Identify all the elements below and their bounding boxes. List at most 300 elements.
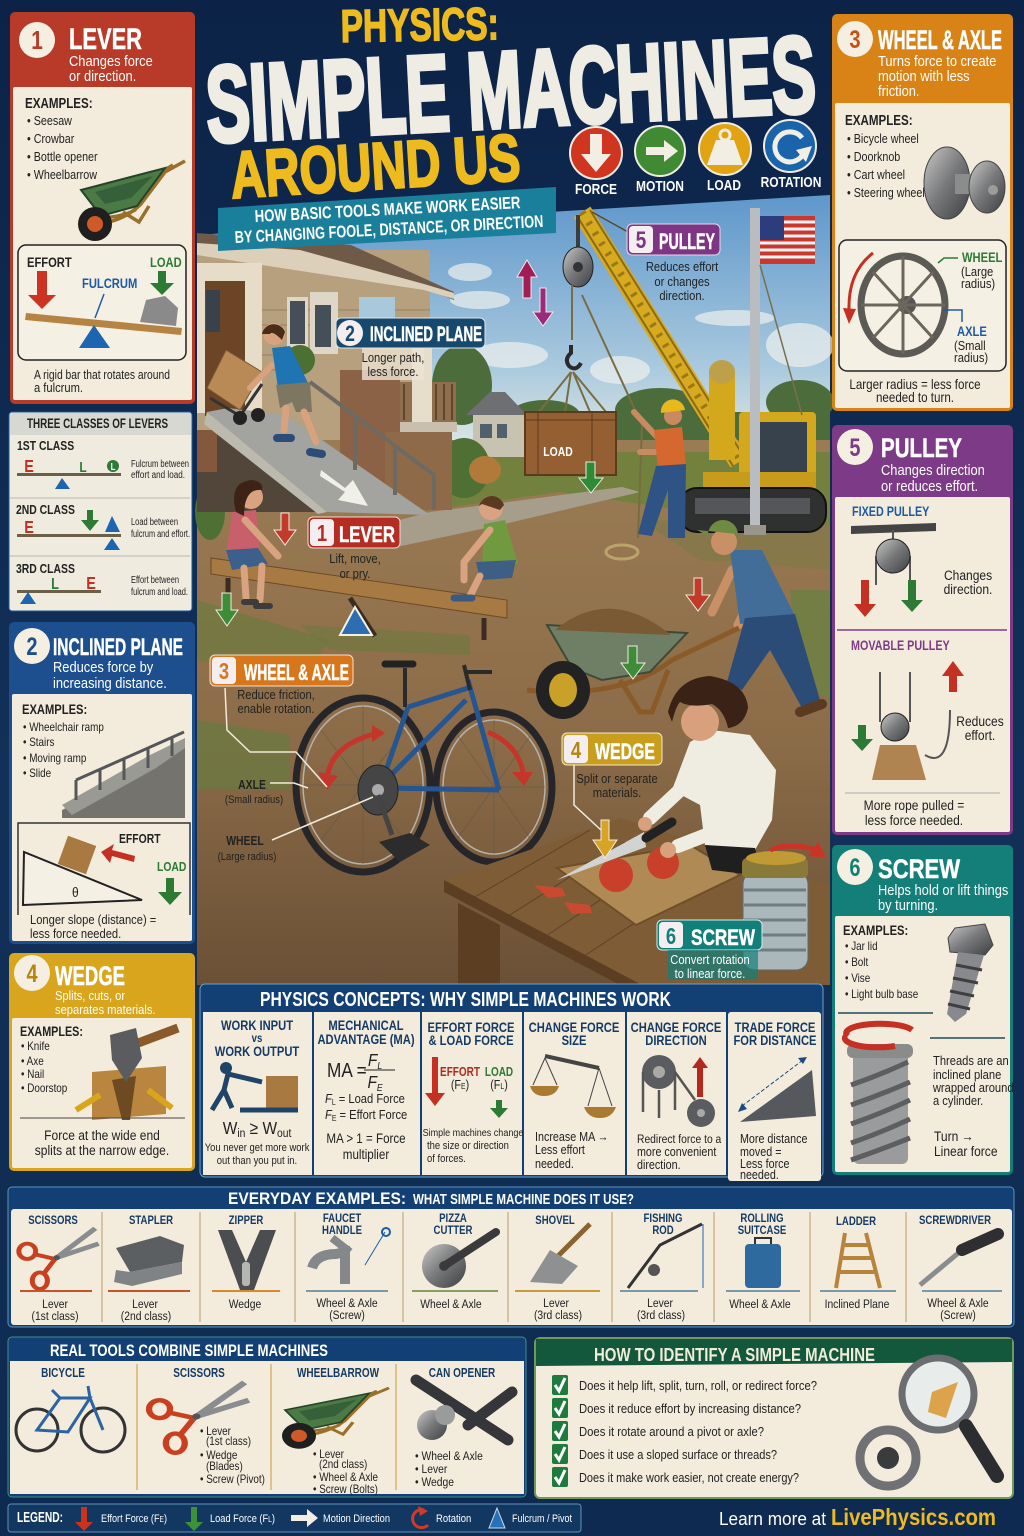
card: change force direction: Redirect force to a <box>637 1133 722 1146</box>
legend bar: Fulcrum / Pivot <box>512 1513 572 1525</box>
item: fishing rod: Lever <box>647 1297 673 1310</box>
card: mechanical advantage: F <box>367 1072 377 1092</box>
footer link <box>719 1504 996 1530</box>
screw notes <box>932 1053 1014 1159</box>
checklist: Does it use a sloped surface or threads? <box>579 1448 777 1462</box>
legend bar: Rotation <box>436 1513 471 1525</box>
item: can opener: CAN OPENER <box>429 1367 495 1380</box>
card: change force direction: direction. <box>637 1158 681 1172</box>
examples list: • Bolt <box>845 956 868 969</box>
caption: More rope pulled = <box>864 797 964 813</box>
heading: Turns force to create <box>878 52 997 69</box>
wedge and hammer illustration <box>76 1028 178 1120</box>
lever diagram: EFFORT <box>27 255 72 270</box>
heading: or direction. <box>69 67 136 84</box>
item: pizza cutter <box>412 1212 498 1311</box>
screw notes: Linear force <box>934 1143 998 1159</box>
card: effort and load force: LOAD <box>485 1066 513 1079</box>
card: mechanical advantage: E <box>332 1113 336 1123</box>
card: trade force for distance: needed. <box>740 1168 779 1182</box>
item: screwdriver: Wheel & Axle <box>927 1297 989 1310</box>
first class row: Fulcrum between <box>131 459 189 470</box>
examples list: • Seesaw <box>27 114 72 128</box>
examples list: • Knife <box>21 1040 50 1053</box>
card: effort and load force: of forces. <box>427 1153 466 1165</box>
footer link: Learn more at <box>719 1509 826 1529</box>
item: rolling suitcase: ROLLING <box>740 1212 784 1225</box>
wheel and axle scene labels: WHEEL <box>226 834 264 848</box>
examples list: • Wheelchair ramp <box>23 721 104 734</box>
hanging pulley, hook and load crate <box>525 215 642 538</box>
item: shovel: SHOVEL <box>535 1214 575 1227</box>
item: ladder: LADDER <box>836 1215 876 1228</box>
item: scissors: SCISSORS <box>28 1214 78 1227</box>
panel: 4 wedge <box>9 953 195 1171</box>
heading: 4 <box>26 960 38 988</box>
item: faucet handle: HANDLE <box>322 1224 362 1237</box>
card: effort and load force: Simple machines change <box>423 1127 523 1139</box>
movable pulley diagram: Reduces <box>956 713 1004 729</box>
examples list: • Crowbar <box>27 132 74 146</box>
item: zipper <box>212 1214 280 1311</box>
heading: 6 <box>849 854 861 882</box>
card: change force direction: more convenient <box>637 1145 717 1159</box>
tag: 2 inclined plane: INCLINED PLANE <box>370 323 482 346</box>
porch house <box>197 233 457 512</box>
card: work input vs output <box>203 1012 312 1175</box>
legend bar: Motion Direction <box>323 1513 390 1525</box>
item: stapler: Lever <box>132 1298 158 1311</box>
item: pizza cutter: Wheel & Axle <box>420 1298 482 1311</box>
wheelbarrow man <box>697 520 822 712</box>
card: work input vs output: out <box>277 1127 292 1140</box>
distant house <box>466 392 527 457</box>
icon: load <box>699 123 751 193</box>
card: mechanical advantage: multiplier <box>343 1147 389 1162</box>
fixed pulley diagram: FIXED PULLEY <box>852 504 929 519</box>
tag: 5 pulley: 5 <box>636 226 646 254</box>
item: scissors: Lever <box>42 1298 68 1311</box>
second class row: fulcrum and effort. <box>131 529 190 540</box>
wheel and axle scene labels: AXLE <box>238 778 266 792</box>
card: change force direction: CHANGE FORCE <box>631 1020 721 1035</box>
panel: three classes of levers <box>9 412 192 611</box>
table, board and tomatoes <box>444 818 830 985</box>
second class row <box>16 503 190 550</box>
item: faucet handle <box>306 1212 390 1322</box>
inclined plane diagram <box>18 823 190 915</box>
fixed pulley diagram: direction. <box>944 581 992 597</box>
first class row: effort and load. <box>131 470 185 481</box>
icon: load: LOAD <box>707 177 741 193</box>
item: wheelbarrow: WHEELBARROW <box>297 1367 379 1380</box>
tag: 4 wedge: WEDGE <box>595 739 655 764</box>
tag: 4 wedge <box>562 733 662 830</box>
icon: rotation: ROTATION <box>761 174 821 190</box>
tag: 2 inclined plane: less force. <box>368 364 418 379</box>
tag: 4 wedge: materials. <box>593 785 641 800</box>
second class row: E <box>24 518 34 537</box>
caption: A rigid bar that rotates around <box>34 367 170 382</box>
examples list: • Vise <box>845 972 870 985</box>
card: change force size: CHANGE FORCE <box>529 1020 619 1035</box>
item: stapler: STAPLER <box>129 1214 173 1227</box>
tag: 2 inclined plane: 2 <box>345 322 355 347</box>
examples list <box>845 112 925 200</box>
caption: Longer slope (distance) = <box>30 912 156 927</box>
wheel and axle scene labels: (Large radius) <box>218 851 276 863</box>
panel: 1 lever <box>10 12 195 404</box>
examples list: • Doorstop <box>21 1082 67 1095</box>
heading: PULLEY <box>881 433 962 463</box>
tag: 3 wheel and axle: WHEEL & AXLE <box>244 660 349 685</box>
wheel and axle scene labels <box>218 778 283 863</box>
item: scissors: (1st class) <box>32 1310 79 1323</box>
heading: Splits, cuts, or <box>55 988 125 1003</box>
tag: 3 wheel and axle <box>210 655 353 716</box>
heading: REAL TOOLS COMBINE SIMPLE MACHINES <box>50 1342 328 1360</box>
first class row: L <box>79 459 87 475</box>
icon: wheelbarrow <box>78 161 185 241</box>
examples list: • Doorknob <box>847 150 900 164</box>
item: fishing rod: FISHING <box>644 1212 682 1225</box>
card: trade force for distance: More distance <box>740 1132 807 1146</box>
heading: Changes direction <box>881 461 985 478</box>
ramp illustration <box>62 732 185 818</box>
tag: 4 wedge: Split or separate <box>576 771 658 786</box>
tag: 6 screw <box>657 920 762 981</box>
card: effort and load force: the size or direction <box>427 1140 509 1152</box>
item: can opener: • Lever <box>415 1463 448 1476</box>
examples list: • Cart wheel <box>847 168 905 182</box>
item: faucet handle: (Screw) <box>329 1309 365 1322</box>
first class row <box>17 439 189 489</box>
item: zipper: Wedge <box>229 1298 261 1311</box>
examples list: EXAMPLES: <box>22 702 87 717</box>
boy on seesaw <box>454 496 518 598</box>
icon: bolt <box>947 924 993 1022</box>
panel: how to identify a simple machine <box>535 1338 1013 1498</box>
card: work input vs output: out than you put in. <box>217 1155 297 1167</box>
heading <box>14 955 156 1017</box>
tag: 5 pulley: or changes <box>654 274 710 289</box>
wheel and axle scene labels: (Small radius) <box>225 794 283 806</box>
icon: large screw <box>838 1013 1005 1164</box>
item: faucet handle: Wheel & Axle <box>316 1297 378 1310</box>
panel: everyday examples <box>8 1187 1014 1327</box>
first class row: L <box>111 461 116 472</box>
item: scissors: • Screw (Pivot) <box>200 1473 265 1486</box>
card: work input vs output: ≥ W <box>245 1118 277 1138</box>
item: ladder: Inclined Plane <box>825 1298 889 1311</box>
tree line <box>432 345 834 452</box>
card: mechanical advantage: MA = <box>327 1059 367 1081</box>
checklist: Does it reduce effort by increasing distance? <box>579 1402 801 1416</box>
hanging pulley, hook and load crate: LOAD <box>543 445 573 459</box>
movable pulley diagram <box>837 630 1007 780</box>
subtitle banner <box>218 187 556 251</box>
heading: WEDGE <box>55 961 125 991</box>
icon: magnifying glass over gear <box>860 1358 997 1486</box>
examples list: • Light bulb base <box>845 988 918 1001</box>
legend bar: LEGEND: <box>17 1510 63 1526</box>
card: mechanical advantage: = Load Force <box>336 1091 405 1106</box>
heading: Reduces force by <box>53 658 153 675</box>
item: shovel: (3rd class) <box>534 1309 582 1322</box>
item: wheelbarrow: (2nd class) <box>319 1458 367 1471</box>
item: pizza cutter: CUTTER <box>434 1224 473 1237</box>
wheel and axle diagram: AXLE <box>957 324 987 339</box>
seesaw <box>211 558 507 640</box>
caption: less force needed. <box>865 812 963 828</box>
panel: 6 screw <box>832 845 1014 1175</box>
tag: 1 lever: 1 <box>317 521 327 547</box>
card: change force size: SIZE <box>562 1033 586 1048</box>
item: fishing rod: (3rd class) <box>637 1309 685 1322</box>
item: rolling suitcase: SUITCASE <box>738 1224 786 1237</box>
heading <box>837 21 1002 99</box>
lever diagram: LOAD <box>150 255 182 270</box>
item: bicycle <box>16 1367 125 1452</box>
item: shovel <box>515 1214 600 1322</box>
heading: WHAT SIMPLE MACHINE DOES IT USE? <box>413 1191 634 1208</box>
card: mechanical advantage: F <box>368 1050 377 1070</box>
card: mechanical advantage: F <box>325 1091 332 1106</box>
third class row: Effort between <box>131 575 179 586</box>
screw notes: Turn → <box>934 1128 974 1144</box>
heading <box>19 22 153 84</box>
wheel and axle diagram: WHEEL <box>962 250 1003 265</box>
item: scissors: SCISSORS <box>173 1367 225 1380</box>
card: mechanical advantage: F <box>325 1107 332 1122</box>
crane <box>577 210 826 532</box>
card: effort and load force: & LOAD FORCE <box>428 1033 514 1048</box>
examples list: • Moving ramp <box>23 752 86 765</box>
examples list: • Slide <box>23 767 51 780</box>
construction worker <box>606 399 686 559</box>
inclined plane diagram: EFFORT <box>119 832 161 846</box>
card: effort and load force: (FL) <box>490 1078 508 1092</box>
panel: 3 wheel and axle <box>832 14 1013 411</box>
tag: 1 lever: Lift, move, <box>329 551 381 566</box>
item: can opener: • Wheel & Axle <box>415 1450 483 1463</box>
examples list: EXAMPLES: <box>845 112 913 128</box>
item: stapler: (2nd class) <box>121 1310 171 1323</box>
caption: needed to turn. <box>876 390 954 405</box>
bicycle callout lines <box>225 688 373 840</box>
tag: 6 screw: SCREW <box>691 925 755 950</box>
checklist: Does it help lift, split, turn, roll, or redirect force? <box>579 1379 817 1393</box>
card: work input vs output: WORK OUTPUT <box>215 1044 299 1059</box>
card: change force direction <box>627 1012 726 1175</box>
item: shovel: Lever <box>543 1297 569 1310</box>
card: trade force for distance <box>728 1012 821 1182</box>
wheel and axle diagram: (Small <box>954 338 986 353</box>
caption: Force at the wide end <box>44 1127 160 1143</box>
heading <box>837 849 1008 913</box>
checklist <box>552 1375 817 1487</box>
item: scissors: (Blades) <box>206 1460 243 1473</box>
girl on seesaw <box>226 480 278 606</box>
second class row: 2ND CLASS <box>16 503 75 517</box>
heading: by turning. <box>878 896 938 913</box>
examples list: • Wheelbarrow <box>27 168 98 182</box>
item: wheelbarrow: • Lever <box>313 1448 344 1461</box>
footer link: LivePhysics.com <box>831 1504 996 1530</box>
sidewalk <box>380 487 640 548</box>
item: scissors: • Lever <box>200 1425 231 1438</box>
examples list: • Bicycle wheel <box>847 132 919 146</box>
caption <box>849 377 981 405</box>
first class row: E <box>24 457 34 476</box>
card: work input vs output: vs <box>252 1032 262 1045</box>
heading: 5 <box>849 434 861 462</box>
caption <box>845 793 1000 828</box>
card: work input vs output: You never get more work <box>205 1142 310 1154</box>
icon: doorknob <box>924 147 1005 219</box>
card: mechanical advantage: L <box>377 1060 382 1071</box>
card: mechanical advantage: L <box>332 1097 336 1107</box>
third class row: L <box>51 576 59 593</box>
item: stapler <box>108 1214 190 1323</box>
card: change force direction: DIRECTION <box>645 1033 707 1048</box>
examples list: EXAMPLES: <box>25 95 93 111</box>
heading: INCLINED PLANE <box>53 634 183 661</box>
icon: motion: MOTION <box>636 178 684 194</box>
item: fishing rod <box>620 1212 703 1322</box>
item: scissors: • Wedge <box>200 1449 237 1462</box>
panel: 2 inclined plane <box>9 622 195 944</box>
card: effort and load force: (FE) <box>451 1078 469 1092</box>
tag: 1 lever <box>308 517 400 581</box>
flagpole and flag <box>744 208 815 535</box>
central illustrated scene <box>195 195 834 985</box>
examples list: EXAMPLES: <box>843 923 908 938</box>
item: screwdriver <box>919 1214 1002 1322</box>
tag: 5 pulley: direction. <box>659 288 705 303</box>
tag: 5 pulley <box>627 224 720 303</box>
tag: 3 wheel and axle: 3 <box>219 659 229 685</box>
lever diagram <box>18 245 186 360</box>
caption: a fulcrum. <box>34 380 83 395</box>
movable pulley diagram: effort. <box>965 727 995 743</box>
heading: increasing distance. <box>53 674 167 691</box>
inclined plane diagram: LOAD <box>157 860 186 874</box>
item: can opener: • Wedge <box>415 1476 454 1489</box>
third class row: E <box>86 574 96 593</box>
panel: 5 pulley <box>832 425 1013 835</box>
card: change force size: needed. <box>535 1157 574 1171</box>
card: effort and load force: EFFORT FORCE <box>428 1020 514 1035</box>
card: mechanical advantage: ADVANTAGE (MA) <box>317 1032 415 1047</box>
third class row: 3RD CLASS <box>16 562 75 576</box>
fixed pulley diagram: Changes <box>944 567 993 583</box>
tag: 2 inclined plane <box>336 318 485 380</box>
third class row <box>16 562 188 604</box>
caption <box>20 1118 185 1158</box>
item: wheelbarrow <box>282 1367 389 1496</box>
wheel and axle diagram <box>839 240 1006 371</box>
examples list: • Steering wheel <box>847 186 925 200</box>
crane arrows <box>517 260 603 493</box>
examples list: • Bottle opener <box>27 150 98 164</box>
legend bar <box>8 1504 581 1532</box>
item: scissors <box>19 1214 99 1323</box>
item: faucet handle: FAUCET <box>323 1212 362 1225</box>
tag: 6 screw: to linear force. <box>675 966 745 981</box>
subtitle banner: HOW BASIC TOOLS MAKE WORK EASIER <box>254 193 521 226</box>
screw notes: wrapped around <box>932 1080 1014 1095</box>
heading: separates materials. <box>55 1002 156 1017</box>
heading: LEVER <box>69 23 142 56</box>
card: mechanical advantage <box>314 1012 420 1175</box>
item: zipper: ZIPPER <box>229 1214 263 1227</box>
card: effort and load force: EFFORT <box>440 1066 480 1079</box>
title: around us: AROUND US <box>228 120 522 212</box>
heading: EVERYDAY EXAMPLES: <box>228 1189 406 1208</box>
caption: splits at the narrow edge. <box>35 1142 169 1158</box>
item: wheelbarrow: • Wheel & Axle <box>313 1471 378 1484</box>
card: mechanical advantage: E <box>377 1082 383 1093</box>
inclined plane diagram: θ <box>72 884 79 900</box>
caption <box>30 912 156 941</box>
tag: 6 screw: 6 <box>666 924 676 950</box>
card: change force size: Less effort <box>535 1143 586 1157</box>
card: mechanical advantage: MA > 1 = Force <box>326 1131 406 1146</box>
item: screwdriver: SCREWDRIVER <box>919 1214 991 1227</box>
heading: 2 <box>26 633 38 661</box>
heading <box>14 628 183 691</box>
item: rolling suitcase <box>726 1212 800 1311</box>
heading: or reduces effort. <box>881 477 978 494</box>
examples list <box>20 1024 83 1095</box>
card: mechanical advantage: = Effort Force <box>336 1107 408 1122</box>
item: screwdriver: (Screw) <box>940 1309 976 1322</box>
card: trade force for distance: TRADE FORCE <box>735 1020 815 1035</box>
item: wheelbarrow: • Screw (Bolts) <box>313 1483 378 1496</box>
item: bicycle: BICYCLE <box>41 1367 85 1380</box>
caption <box>34 367 170 395</box>
icon: force <box>570 127 622 197</box>
examples list: • Axe <box>21 1055 44 1068</box>
card: change force size <box>524 1012 625 1175</box>
panel: physics concepts <box>200 984 823 1182</box>
heading: motion with less <box>878 67 970 84</box>
tag: 3 wheel and axle: Reduce friction, <box>237 687 315 702</box>
tag: 1 lever: or pry. <box>340 566 370 581</box>
second class row: Load between <box>131 517 178 528</box>
examples list <box>22 702 104 780</box>
screw notes: Threads are an <box>933 1053 1009 1068</box>
examples list <box>25 95 98 182</box>
heading: friction. <box>878 82 920 99</box>
checklist: Does it make work easier, not create energy? <box>579 1471 799 1485</box>
screw notes: inclined plane <box>933 1067 1002 1082</box>
child pushing box on dolly <box>207 323 322 454</box>
ramp <box>204 382 434 515</box>
first class row: 1ST CLASS <box>17 439 74 453</box>
subtitle banner: BY CHANGING FOOLE, DISTANCE, OR DIRECTION <box>234 212 544 247</box>
caption: Larger radius = less force <box>849 377 981 392</box>
card: effort and load force <box>422 1012 523 1175</box>
legend bar: Effort Force (FE) <box>101 1513 167 1525</box>
examples list <box>843 923 918 1001</box>
card: mechanical advantage: MECHANICAL <box>328 1018 404 1033</box>
card: trade force for distance: moved = <box>740 1145 782 1159</box>
heading: Changes force <box>69 52 153 69</box>
tag: 2 inclined plane: Longer path, <box>362 350 424 365</box>
examples list: • Jar lid <box>845 940 878 953</box>
